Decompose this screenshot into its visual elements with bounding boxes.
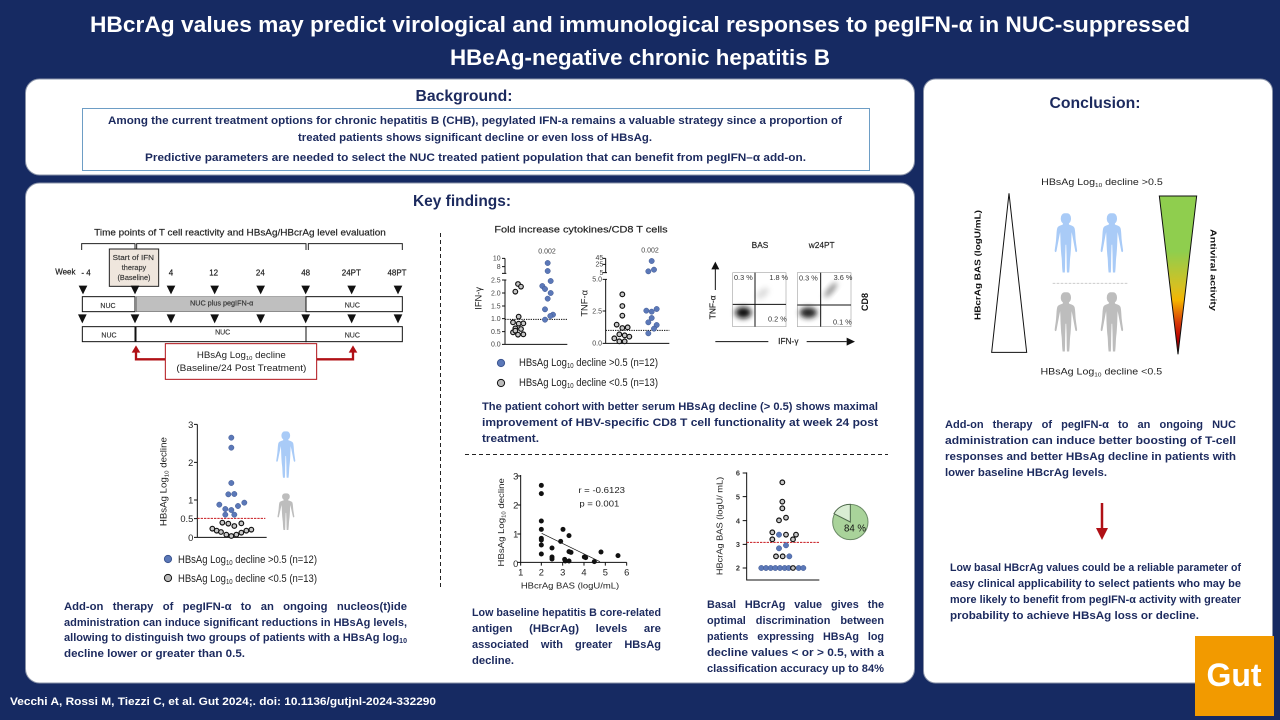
text: baseline HBcrAg finding: decline. xyxy=(472,655,514,667)
week labels: 24PT xyxy=(342,269,361,278)
treatment arm 2: NUC xyxy=(101,333,117,340)
text: conclusion HBcrAg parameter: Low basal HBcrAg values could be a reliable parameter of xyxy=(950,562,1241,574)
text: cohort finding: treatment. xyxy=(482,433,539,445)
treatment arm 1: NUC plus pegIFN-α xyxy=(190,301,253,308)
legend: decline groups left: 10 xyxy=(226,579,233,586)
week labels: 48 xyxy=(301,269,311,278)
chart: correlation scatter plot: 2 xyxy=(539,568,544,578)
text: baseline HBcrAg finding: associated with greater HBsAg xyxy=(472,639,661,651)
chart: flow cytometry plots: TNF-α xyxy=(707,295,717,319)
chart: cytokine fold increase: 0.002 xyxy=(641,248,659,255)
chart: flow cytometry plots: w24PT xyxy=(808,240,835,250)
chart: basal HBcrAg dot plot xyxy=(715,469,868,580)
chart: basal HBcrAg dot plot: 5 xyxy=(736,492,740,501)
legend: decline groups left: 10 xyxy=(226,560,233,567)
chart: cytokine fold increase: 45 xyxy=(596,255,603,262)
text: conclusion add-on therapy: Add-on therapy of pegIFN-α to an ongoing NUC xyxy=(945,419,1236,431)
baseline box: Start of IFN xyxy=(113,253,154,262)
legend: decline groups left: decline <0.5 (n=13) xyxy=(233,573,317,585)
treatment arm 2: NUC xyxy=(215,330,230,337)
text: classification finding: optimal discrimination between xyxy=(707,615,884,627)
chart: HBsAg decline dot plot: decline xyxy=(159,437,169,470)
chart: flow cytometry plots: BAS xyxy=(752,240,769,250)
chart: HBsAg decline dot plot: HBsAg Log xyxy=(159,481,169,526)
chart: cytokine fold increase: 1.5 xyxy=(491,303,501,310)
conclusion diagram: decline >0.5 xyxy=(1102,177,1163,187)
pie chart: accuracy 84% xyxy=(833,504,868,540)
time point markers xyxy=(78,286,402,323)
chart: cytokine fold increase: 0.5 xyxy=(491,329,501,336)
chart: HBsAg decline dot plot: 0.5 xyxy=(180,514,193,524)
chart: cytokine fold increase: 5.0 xyxy=(592,277,602,284)
background text box: Predictive parameters are needed to select the NUC treated patient population that can benefit from pegIFN–α add-on. xyxy=(145,152,806,164)
text: left finding: 10 xyxy=(399,638,407,645)
chart: correlation scatter plot: 6 xyxy=(624,568,629,578)
week labels: 48PT xyxy=(387,269,407,278)
panel: background xyxy=(26,79,914,175)
chart: cytokine fold increase: 0.0 xyxy=(592,341,602,348)
chart: HBsAg decline dot plot: 10 xyxy=(164,470,170,477)
chart: correlation scatter plot: 10 xyxy=(502,511,508,518)
text: conclusion HBcrAg parameter xyxy=(950,562,1242,622)
treatment arm 1 xyxy=(82,297,402,312)
text: baseline HBcrAg finding: antigen (HBcrAg) levels are xyxy=(472,623,661,635)
legend: decline groups left: HBsAg Log xyxy=(178,554,234,566)
legend: decline groups middle: 10 xyxy=(567,383,574,390)
legend: decline groups left: HBsAg Log xyxy=(178,573,234,585)
text: conclusion add-on therapy: lower baseline HBcrAg levels. xyxy=(945,467,1107,479)
chart: basal HBcrAg dot plot: HBcrAg BAS (logU/ mL) xyxy=(715,477,725,575)
conclusion diagram: HBsAg Log xyxy=(1040,367,1088,377)
chart: basal HBcrAg dot plot: 4 xyxy=(736,516,741,525)
chart: HBsAg decline dot plot xyxy=(159,420,267,543)
chart: correlation scatter plot: 3 xyxy=(513,471,518,481)
chart: correlation scatter plot: 1 xyxy=(518,568,523,578)
chart: flow cytometry plots xyxy=(707,240,870,346)
chart: basal HBcrAg dot plot: 3 xyxy=(736,540,740,549)
text: left finding: decline lower or greater than 0.5. xyxy=(64,648,245,660)
heading: background: Background: xyxy=(416,88,512,105)
journal logo: Gut xyxy=(1195,636,1274,716)
chart: correlation scatter plot: 2 xyxy=(513,500,518,510)
chart: cytokine fold increase: 10 xyxy=(493,256,501,263)
baseline box xyxy=(109,249,159,286)
chart: flow cytometry plots: 0.1 % xyxy=(833,317,852,326)
chart: correlation scatter plot: 3 xyxy=(560,568,565,578)
legend: decline groups left: decline >0.5 (n=12) xyxy=(233,554,317,566)
baseline box: (Baseline) xyxy=(117,273,150,282)
week labels: Week xyxy=(55,268,75,277)
title: HBeAg-negative chronic hepatitis B xyxy=(450,45,830,70)
legend: decline groups middle: 10 xyxy=(567,363,574,370)
text: conclusion add-on therapy: responses and better HBsAg decline in patients with xyxy=(945,451,1236,463)
legend: decline groups middle: decline <0.5 (n=13) xyxy=(574,377,658,389)
treatment arm 1: NUC xyxy=(345,303,360,310)
legend: decline groups left xyxy=(164,554,317,586)
chart: HBsAg decline dot plot: 1 xyxy=(188,496,193,506)
chart: HBsAg decline dot plot: 2 xyxy=(188,458,193,468)
week labels: 12 xyxy=(209,269,219,278)
chart: correlation scatter plot: decline xyxy=(496,478,506,511)
panel: conclusion xyxy=(924,79,1272,683)
legend: decline groups middle: HBsAg Log xyxy=(519,377,575,389)
text: conclusion HBcrAg parameter: easy clinical applicability to select patients who may be xyxy=(950,578,1241,590)
pie chart: accuracy 84%: 84 % xyxy=(844,523,866,534)
treatment arm 1: NUC xyxy=(100,303,116,310)
journal logo: Gut: Gut xyxy=(1206,657,1262,693)
baseline box: therapy xyxy=(122,263,147,272)
decline callout: 10 xyxy=(246,356,252,362)
chart: cytokine fold increase: 2.0 xyxy=(491,290,501,297)
chart: flow cytometry plots: 1.8 % xyxy=(769,273,789,282)
text: conclusion HBcrAg parameter: more likely to benefit from pegIFN-α activity with greater xyxy=(950,594,1242,606)
background text box xyxy=(82,108,870,170)
text: baseline HBcrAg finding xyxy=(472,607,661,667)
text: baseline HBcrAg finding: Low baseline hepatitis B core-related xyxy=(472,607,661,619)
study timeline diagram xyxy=(55,228,407,379)
text: left finding: allowing to distinguish two groups of patients with a HBsAg log xyxy=(64,632,398,644)
background text box: Among the current treatment options for chronic hepatitis B (CHB), pegylated IFN-a remains a valuable strategy since a proportion of xyxy=(108,115,842,127)
chart: flow cytometry plots: 0.2 % xyxy=(768,314,787,323)
text: left finding xyxy=(64,601,407,660)
text: conclusion add-on therapy xyxy=(945,419,1236,479)
treatment arm 2 xyxy=(82,327,402,342)
week labels: 24 xyxy=(256,269,265,278)
text: cohort finding: The patient cohort with better serum HBsAg decline (> 0.5) shows maximal xyxy=(482,401,878,413)
chart: correlation scatter plot: 4 xyxy=(581,568,587,578)
chart: correlation scatter plot: r = -0.6123 xyxy=(578,485,625,495)
chart: cytokine fold increase: 0.002 xyxy=(538,249,556,256)
chart: cytokine fold increase: 2.5 xyxy=(592,308,602,315)
decline callout: HBsAg Log xyxy=(197,350,244,360)
background text box: treated patients shows significant decline or even loss of HBsAg. xyxy=(298,132,652,144)
chart: correlation scatter plot: HBcrAg BAS (logU/mL) xyxy=(521,581,619,591)
week labels xyxy=(55,268,407,278)
conclusion diagram: 10 xyxy=(1094,373,1102,379)
text: cohort finding xyxy=(482,401,878,445)
chart: flow cytometry plots: 3.6 % xyxy=(834,273,853,282)
text: left finding: Add-on therapy of pegIFN-α to an ongoing nucleos(t)ide xyxy=(64,601,407,613)
chart: correlation scatter plot xyxy=(496,471,629,591)
chart: cytokine fold increase: TNF-α xyxy=(579,289,589,317)
text: conclusion add-on therapy: administration can induce better boosting of T-cell xyxy=(945,435,1236,447)
chart: HBsAg decline dot plot: 3 xyxy=(188,420,193,430)
conclusion diagram: 10 xyxy=(1095,183,1102,189)
chart: cytokine fold increase: IFN-γ xyxy=(473,287,483,310)
chart: flow cytometry plots: CD8 xyxy=(860,293,870,311)
chart: cytokine fold increase: 1.0 xyxy=(491,316,501,323)
text: conclusion HBcrAg parameter: probability to achieve HBsAg loss or decline. xyxy=(950,610,1199,622)
chart: correlation scatter plot: HBsAg Log xyxy=(496,523,506,566)
title: HBcrAg values may predict virological and immunological responses to pegIFN-α in NUC-suppressed xyxy=(90,12,1190,37)
panel: key findings xyxy=(26,183,914,683)
conclusion diagram: HBsAg Log xyxy=(1041,177,1088,187)
chart: basal HBcrAg dot plot: 6 xyxy=(736,469,740,478)
text: classification finding xyxy=(707,599,885,675)
decline callout: decline xyxy=(252,350,286,360)
chart: flow cytometry plots: IFN-γ xyxy=(778,336,799,346)
chart: cytokine fold increase xyxy=(473,225,669,349)
arrow: conclusion flow xyxy=(1096,503,1108,540)
chart: HBsAg decline dot plot: 0 xyxy=(188,533,193,543)
chart: cytokine fold increase: Fold increase cytokines/CD8 T cells xyxy=(494,225,668,235)
treatment arm 2: NUC xyxy=(345,333,360,340)
text: classification finding: patients expressing HBsAg log xyxy=(707,631,884,643)
week labels: - 4 xyxy=(81,269,91,278)
text: classification finding: decline values < or > 0.5, with a xyxy=(707,647,885,659)
chart: correlation scatter plot: 5 xyxy=(603,568,608,578)
legend: decline groups middle: HBsAg Log xyxy=(519,357,575,369)
week labels: 4 xyxy=(169,269,174,278)
text: cohort finding: improvement of HBV-specific CD8 T cell functionality at week 24 post xyxy=(482,417,878,429)
chart: correlation scatter plot: 0 xyxy=(513,559,518,569)
study timeline diagram: Time points of T cell reactivity and HBsAg/HBcrAg level evaluation xyxy=(94,228,386,238)
chart: correlation scatter plot: p = 0.001 xyxy=(579,499,620,509)
chart: cytokine fold increase: 8 xyxy=(497,264,501,271)
heading: key findings: Key findings: xyxy=(413,193,511,210)
chart: flow cytometry plots: 0.3 % xyxy=(734,273,753,282)
decline callout: (Baseline/24 Post Treatment) xyxy=(176,363,306,373)
chart: correlation scatter plot: 1 xyxy=(513,529,518,539)
title xyxy=(90,12,1190,70)
conclusion diagram: decline <0.5 xyxy=(1102,367,1162,377)
red arrows xyxy=(132,345,357,359)
citation: Vecchi A, Rossi M, Tiezzi C, et al. Gut 2024;. doi: 10.1136/gutjnl-2024-332290 xyxy=(10,696,436,708)
chart: flow cytometry plots: 0.3 % xyxy=(799,274,818,283)
decline callout xyxy=(165,344,317,379)
text: left finding: administration can induce significant reductions in HBsAg levels, xyxy=(64,617,407,629)
chart: cytokine fold increase: 2.5 xyxy=(491,277,501,284)
conclusion diagram: Antiviral activity xyxy=(1209,229,1219,311)
heading: conclusion: Conclusion: xyxy=(1050,95,1140,112)
chart: basal HBcrAg dot plot: 2 xyxy=(736,564,740,573)
chart: cytokine fold increase: 25 xyxy=(596,262,603,269)
legend: decline groups middle xyxy=(497,357,658,390)
conclusion diagram xyxy=(973,177,1219,379)
legend: decline groups middle: decline >0.5 (n=12) xyxy=(574,357,658,369)
chart: cytokine fold increase: 5 xyxy=(599,270,603,277)
icon: non-responder person xyxy=(278,493,294,530)
conclusion diagram: HBcrAg BAS (logU/mL) xyxy=(973,210,983,320)
text: classification finding: classification accuracy up to 84% xyxy=(707,663,884,675)
text: classification finding: Basal HBcrAg value gives the xyxy=(707,599,884,611)
chart: cytokine fold increase: 0.0 xyxy=(491,342,501,349)
icon: responder person xyxy=(276,431,295,478)
